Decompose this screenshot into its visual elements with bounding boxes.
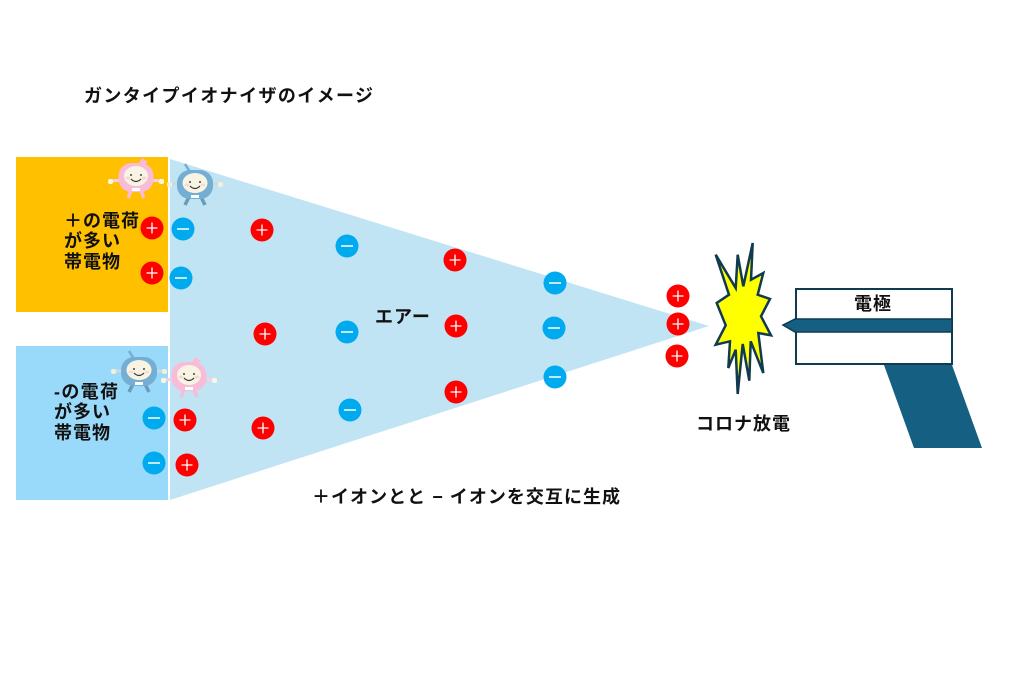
caption: ion generation: ＋イオンとと − イオンを交互に生成 (312, 486, 621, 507)
electrode rod (783, 319, 952, 332)
icon: blue character bottom (111, 351, 167, 392)
title: ガンタイプイオナイザのイメージ (84, 86, 374, 106)
icon: blue character top (167, 164, 223, 205)
label: positive charge object: が多い (64, 230, 121, 251)
label: corona discharge: コロナ放電 (696, 414, 791, 434)
air cone (170, 159, 709, 500)
label: positive charge object (64, 211, 140, 272)
label: air: エアー (375, 307, 431, 327)
gun handle (884, 365, 982, 448)
label: positive charge object: 帯電物 (64, 252, 121, 272)
panel: negatively charged object (16, 346, 168, 500)
label: electrode: 電極 (854, 294, 892, 314)
icon: corona discharge burst (716, 243, 771, 394)
label: negative charge object: 帯電物 (54, 423, 111, 443)
electrode housing (796, 289, 952, 364)
label: negative charge object (54, 382, 119, 443)
label: negative charge object: -の電荷 (54, 382, 119, 402)
panel: positively charged object (16, 157, 168, 312)
icon: pink character bottom (161, 357, 217, 397)
negative ions (142, 218, 566, 474)
positive ions (140, 216, 690, 476)
gun (783, 289, 982, 448)
icon: pink character top (108, 158, 164, 198)
label: negative charge object: が多い (54, 401, 111, 422)
label: positive charge object: ＋の電荷 (64, 211, 140, 231)
